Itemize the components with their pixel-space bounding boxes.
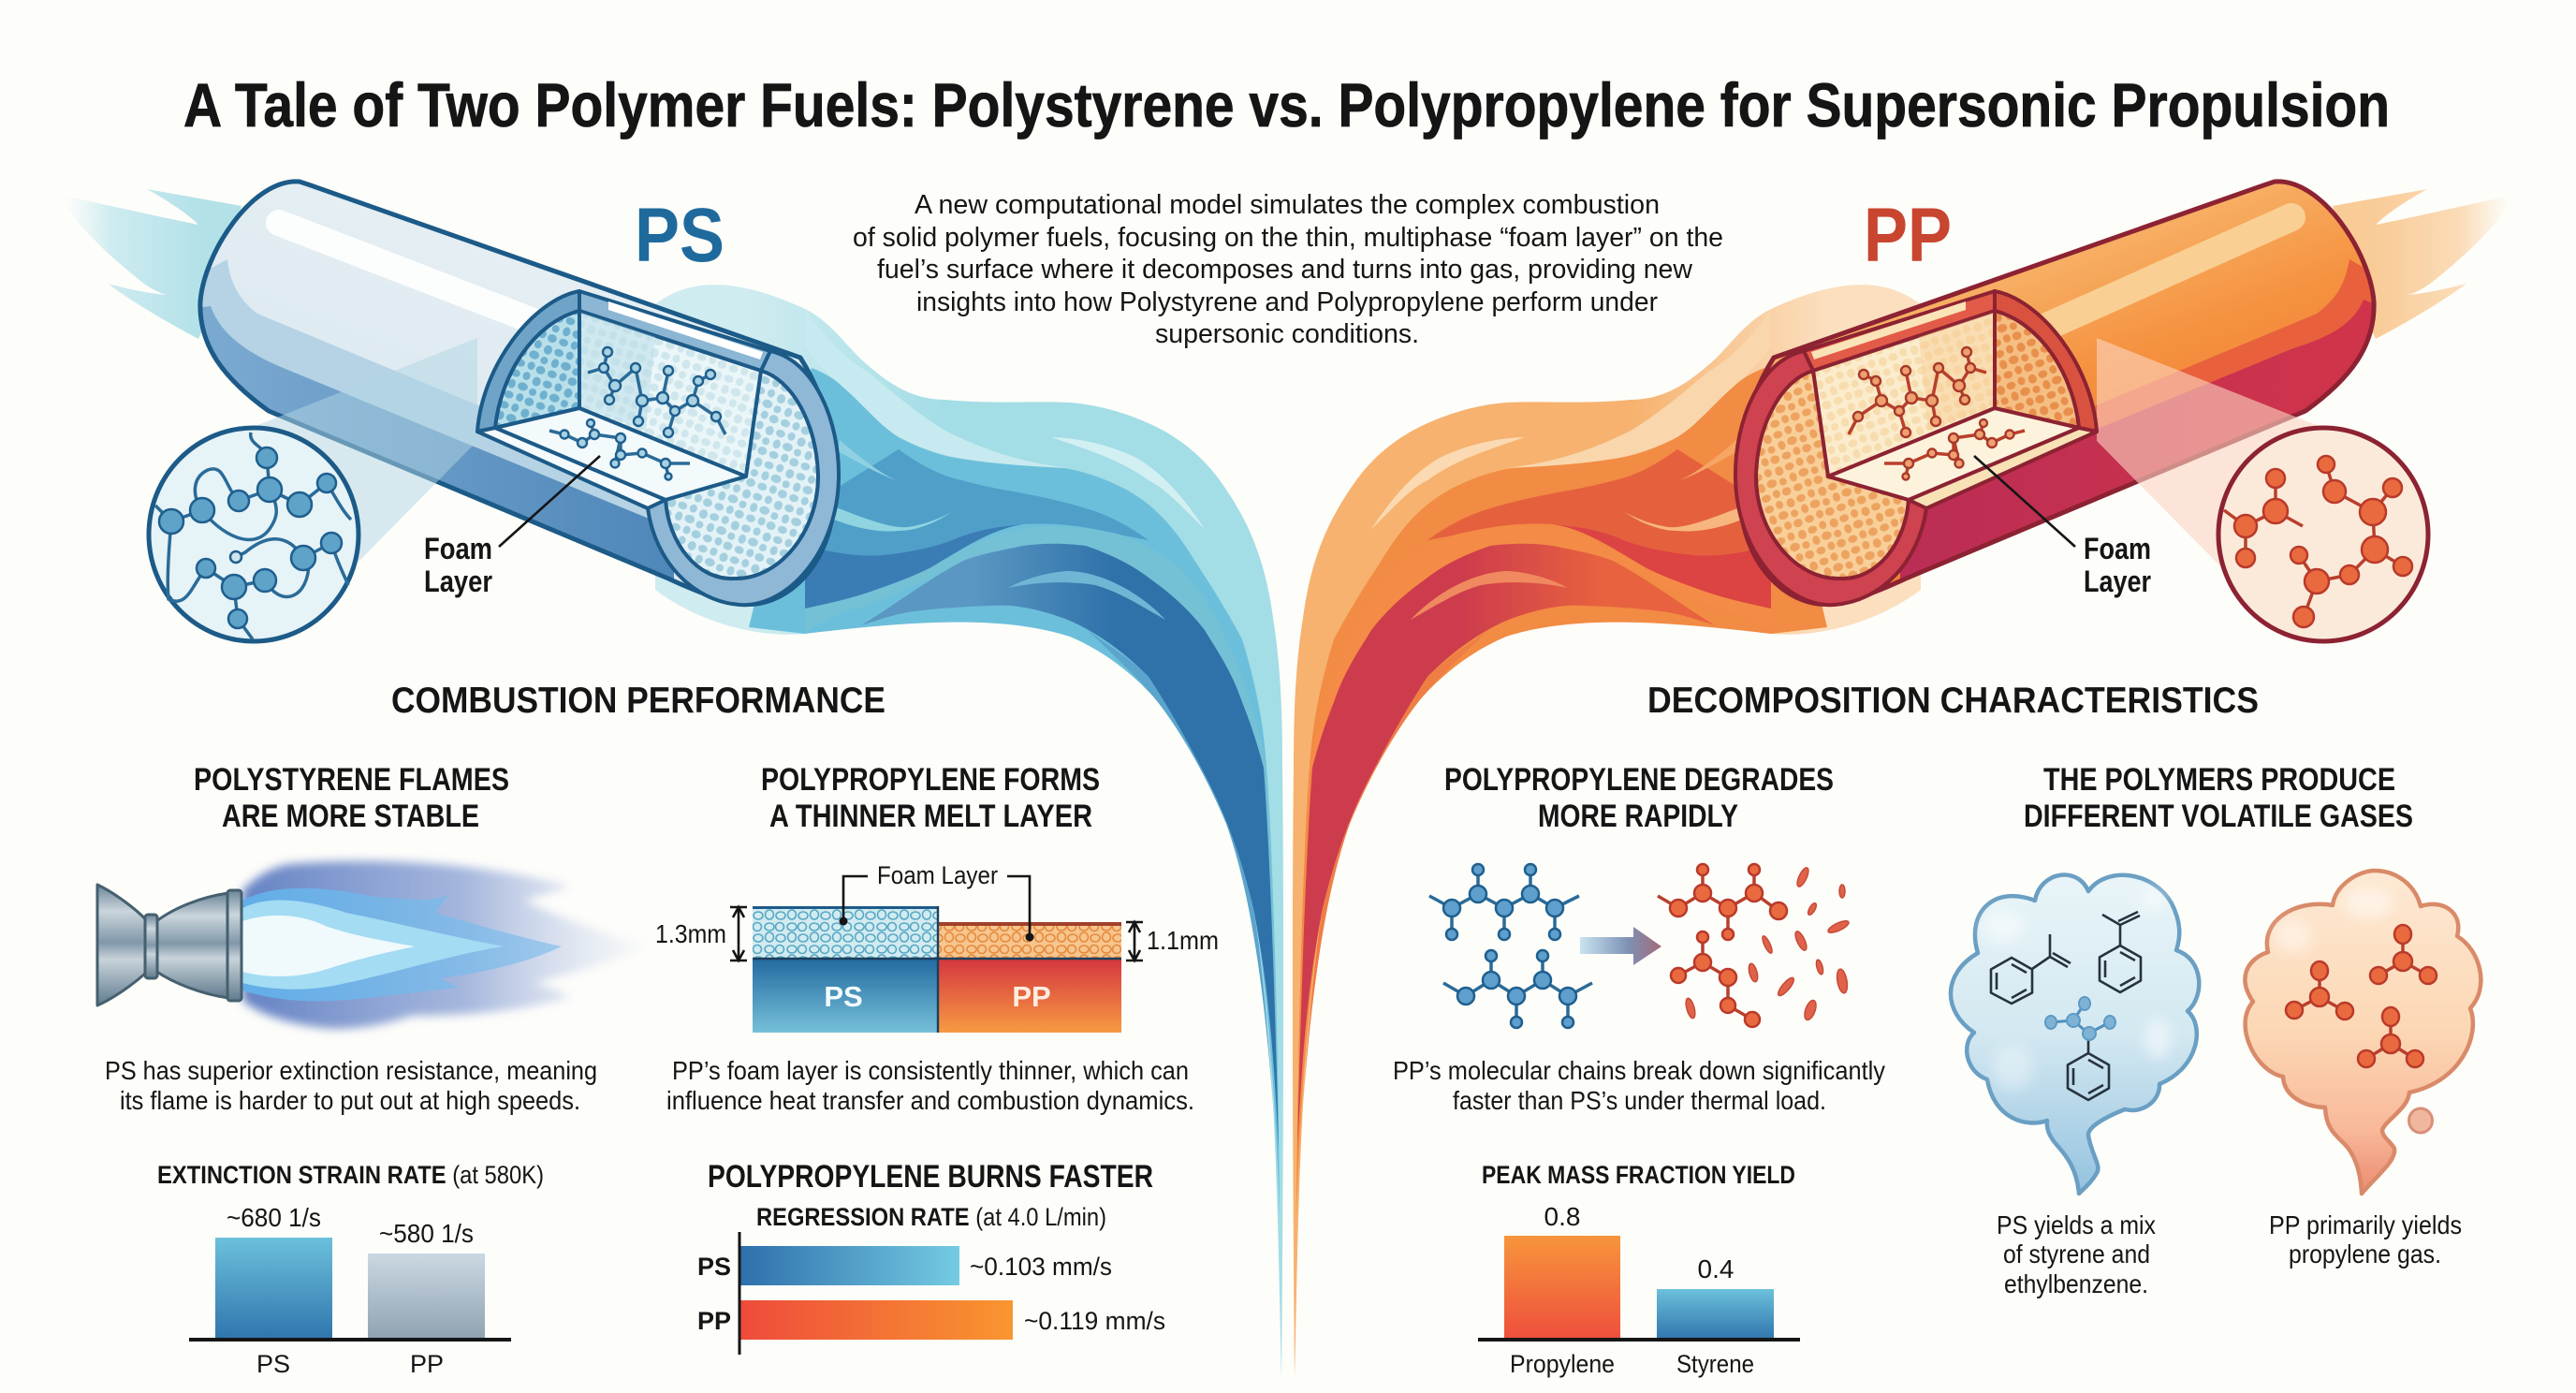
foam layer callout: Foam Layer	[877, 861, 998, 889]
foam layer label PP	[2084, 532, 2151, 598]
PP tube cutaway	[1735, 291, 2097, 605]
degradation diagram	[1429, 864, 1851, 1028]
foam layer label PP: Layer	[2084, 565, 2151, 598]
chart heading: POLYPROPYLENE BURNS FASTER	[708, 1159, 1153, 1195]
sub-heading: polystyrene flames: ARE MORE STABLE	[222, 799, 479, 834]
sub-heading: thinner melt layer	[761, 762, 1100, 834]
description: PP degrades faster: faster than PS’s under thermal load.	[1453, 1086, 1826, 1115]
sub-heading: polystyrene flames	[194, 762, 509, 834]
styrene structure	[1991, 934, 2071, 1004]
PP bar	[739, 1300, 1013, 1340]
value labels	[1544, 1202, 1734, 1283]
value labels: ~0.103 mm/s	[970, 1253, 1112, 1281]
value labels: 0.8	[1544, 1202, 1580, 1231]
sub-heading: degrades more rapidly: POLYPROPYLENE DEGRADES	[1444, 762, 1834, 798]
description: PP gases: PP primarily yields	[2269, 1210, 2462, 1239]
value labels	[227, 1203, 474, 1248]
PS foam and base block	[753, 906, 938, 959]
chart title: EXTINCTION STRAIN RATE (at 580K)	[157, 1161, 544, 1189]
intro text block: of solid polymer fuels, focusing on the thin, multiphase “foam layer” on the	[853, 223, 1723, 253]
section heading: combustion performance: COMBUSTION PERFORMANCE	[391, 681, 886, 721]
description: PP thinner foam	[666, 1056, 1194, 1115]
PS bar	[215, 1238, 332, 1340]
axis labels: Styrene	[1676, 1350, 1754, 1378]
foam layer label PS: Foam	[424, 532, 492, 565]
dimension values: 1.3mm	[655, 919, 726, 948]
molecule on back wall	[588, 347, 725, 437]
foam layer label PS: Layer	[424, 565, 492, 598]
axis labels: PP	[410, 1350, 444, 1378]
intro text block: insights into how Polystyrene and Polypropylene perform under	[916, 287, 1658, 317]
magnifier beam	[251, 338, 477, 571]
foam layer diagram: 1.1mm	[1147, 926, 1219, 955]
value labels: ~580 1/s	[379, 1219, 474, 1248]
sub-heading: volatile gases: DIFFERENT VOLATILE GASES	[2024, 799, 2413, 834]
PP label: PP	[1864, 193, 1952, 278]
cloud highlights	[1983, 887, 2171, 1090]
description: PS gases: of styrene and	[2003, 1239, 2150, 1268]
description: PS extinction resistance	[105, 1056, 597, 1115]
value labels	[970, 1253, 1165, 1335]
description: PS gases: PS yields a mix	[1997, 1210, 2156, 1239]
molecule on floor	[1884, 419, 2025, 479]
row labels: PP	[697, 1307, 731, 1335]
droplet	[2409, 1108, 2432, 1133]
PS tube body	[200, 182, 836, 605]
description: PP degrades faster: PP’s molecular chains break down significantly	[1393, 1056, 1885, 1085]
orange flow stream	[1293, 285, 1921, 1378]
axis labels: Propylene	[1510, 1350, 1615, 1378]
magnifier beam	[2097, 338, 2323, 571]
sub-heading: volatile gases	[2024, 762, 2413, 834]
exhaust flame behind PP tube	[2333, 189, 2515, 339]
axis labels: PS	[256, 1350, 290, 1378]
intro text block: fuel’s surface where it decomposes and turns into gas, providing new	[877, 255, 1693, 285]
propylene bar	[1504, 1236, 1620, 1340]
PS tube illustration	[59, 182, 839, 618]
block labels	[824, 980, 1051, 1013]
sub-heading: degrades more rapidly: MORE RAPIDLY	[1538, 799, 1738, 834]
arrow	[1580, 927, 1661, 965]
sub-heading: thinner melt layer: A THINNER MELT LAYER	[769, 799, 1092, 834]
ethylbenzene structure	[2100, 912, 2141, 992]
PP tube illustration	[1735, 182, 2515, 618]
description: PP thinner foam: PP’s foam layer is consistently thinner, which can	[672, 1056, 1189, 1085]
blue flow stream	[655, 285, 1283, 1378]
description: PS extinction resistance: PS has superior extinction resistance, meaning	[105, 1056, 597, 1085]
styrene bar	[1657, 1289, 1774, 1340]
broken PP chains	[1658, 864, 1851, 1027]
cloud shape	[2245, 871, 2481, 1194]
molecule on back wall	[1849, 347, 1986, 437]
dimension marks	[730, 907, 1143, 960]
PP gas cloud	[2245, 871, 2481, 1194]
PP bar	[368, 1254, 485, 1340]
sub-heading: degrades more rapidly	[1444, 762, 1834, 834]
PS magnifier circle	[149, 428, 359, 641]
propylene molecules	[2286, 925, 2437, 1067]
PP tube body	[1738, 182, 2374, 605]
value labels: ~0.119 mm/s	[1024, 1307, 1165, 1335]
section heading: decomposition characteristics: DECOMPOSITION CHARACTERISTICS	[1647, 681, 2259, 721]
chart: extinction strain rate	[157, 1161, 544, 1378]
foam layer diagram	[655, 861, 1219, 1033]
sub-heading: thinner melt layer: POLYPROPYLENE FORMS	[761, 762, 1100, 798]
chart: peak mass fraction yield	[1478, 1161, 1800, 1378]
intro text block	[853, 190, 1723, 349]
description: PS gases: ethylbenzene.	[2004, 1269, 2148, 1298]
block labels: PP	[1012, 980, 1051, 1013]
axis labels	[1510, 1350, 1754, 1378]
flame	[242, 861, 646, 1029]
fragments	[1684, 866, 1851, 1021]
PP foam and base block	[938, 922, 1121, 959]
row labels: PS	[697, 1253, 731, 1281]
molecule on floor	[549, 419, 690, 479]
nozzle body	[97, 885, 242, 1005]
exhaust flame behind PS tube	[59, 189, 242, 339]
sub-heading: polystyrene flames: POLYSTYRENE FLAMES	[194, 762, 509, 798]
intro text block: A new computational model simulates the complex combustion	[915, 190, 1660, 220]
foam layer label PP: Foam	[2084, 532, 2151, 565]
description: PP thinner foam: influence heat transfer and combustion dynamics.	[666, 1086, 1194, 1115]
value labels: ~680 1/s	[227, 1203, 321, 1232]
PS bar	[739, 1246, 959, 1285]
third structure	[2045, 997, 2115, 1100]
PS label: PS	[635, 193, 724, 278]
PS tube cutaway	[477, 291, 839, 605]
foam layer label PS	[424, 532, 492, 598]
foam layer pointer	[1974, 456, 2075, 547]
chart: regression rate	[697, 1159, 1165, 1355]
value labels: 0.4	[1698, 1254, 1734, 1283]
axis labels	[256, 1350, 444, 1378]
description: PS gases	[1997, 1210, 2156, 1298]
nozzle with blue flame	[97, 861, 646, 1029]
cloud highlights	[2275, 888, 2393, 953]
row labels	[697, 1253, 731, 1335]
description: PP degrades faster	[1393, 1056, 1885, 1115]
intact PS chains	[1429, 864, 1592, 1028]
sub-heading: volatile gases: THE POLYMERS PRODUCE	[2043, 762, 2395, 798]
intro text block: supersonic conditions.	[1155, 319, 1419, 349]
PS gas cloud	[1951, 875, 2199, 1194]
description: PS extinction resistance: its flame is harder to put out at high speeds.	[120, 1086, 580, 1115]
description: PP gases: propylene gas.	[2289, 1239, 2441, 1268]
block labels: PS	[824, 980, 863, 1013]
cloud shape	[1951, 875, 2199, 1194]
chart subtitle: REGRESSION RATE (at 4.0 L/min)	[756, 1203, 1106, 1231]
PP magnifier circle	[2218, 428, 2428, 641]
chart title: PEAK MASS FRACTION YIELD	[1482, 1161, 1795, 1189]
description: PP gases	[2269, 1210, 2462, 1268]
foam layer pointer	[499, 456, 600, 547]
